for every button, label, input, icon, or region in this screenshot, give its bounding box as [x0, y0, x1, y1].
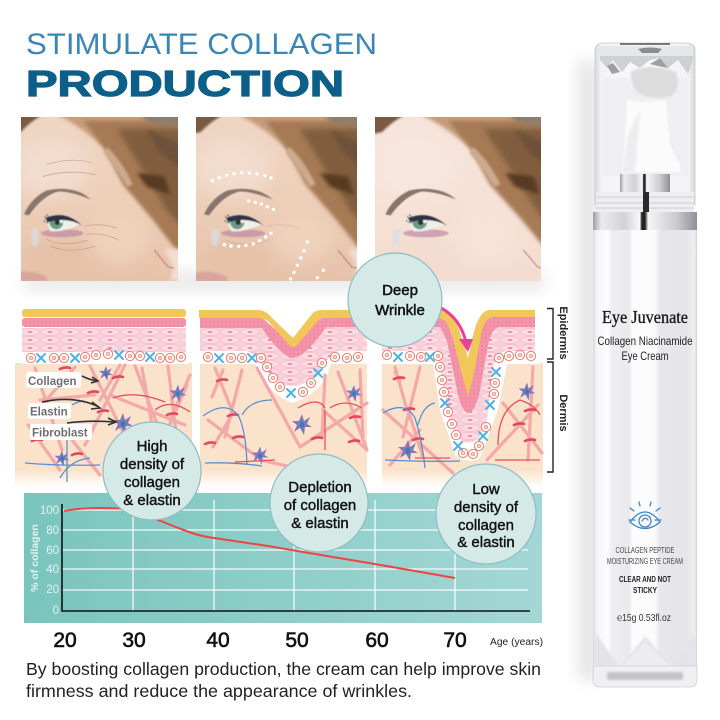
arrow: to fibroblast	[67, 418, 116, 425]
title line: production: PRODUCTION	[26, 63, 344, 104]
callout: high density: density of	[120, 456, 185, 473]
bottle body	[593, 230, 697, 670]
arrow: to elastin	[42, 399, 100, 409]
x axis labels: 20	[53, 629, 77, 652]
icon: eye logo	[629, 502, 661, 528]
arrow: to collagen	[82, 376, 98, 383]
bracket: epidermis	[547, 306, 569, 360]
label: elastin: Elastin	[30, 406, 68, 418]
callout: low density: density of	[454, 499, 519, 516]
x axis labels: 60	[365, 629, 389, 652]
bracket: dermis	[547, 362, 569, 472]
x axis labels: 70	[443, 629, 467, 652]
y axis labels: 100	[40, 505, 59, 517]
clear base	[593, 666, 697, 687]
photo strip: before and after faces	[9, 113, 565, 290]
x axis labels: 40	[206, 629, 230, 652]
bracket: dermis: Dermis	[557, 394, 569, 432]
body text: firmness and reduce the appearance of wrinkles.	[26, 681, 412, 701]
label: fibroblast: Fibroblast	[32, 428, 88, 440]
axes	[62, 504, 530, 611]
product claims: CLEAR AND NOT	[619, 575, 671, 584]
title line: stimulate collagen: STIMULATE COLLAGEN	[26, 28, 377, 61]
product claims: STICKY	[633, 586, 658, 595]
y axis labels: 40	[46, 564, 59, 576]
callout: depletion: Depletion	[288, 479, 352, 496]
x axis labels: 50	[285, 629, 309, 652]
body text: By boosting collagen production, the cream can help improve skin	[26, 659, 541, 679]
callout: deep wrinkle: Deep	[382, 282, 418, 299]
chart: collagen by age	[24, 493, 542, 623]
callout: high density: High	[137, 438, 167, 455]
y axis labels: 60	[46, 545, 59, 557]
silver collar	[593, 212, 697, 230]
label: collagen: Collagen	[28, 376, 77, 388]
skin diagram: deep wrinkle	[382, 308, 543, 488]
title	[26, 28, 377, 104]
y axis labels: 80	[46, 525, 59, 537]
callout: high density: collagen	[124, 474, 180, 491]
brand name: Eye Juvenate	[602, 307, 688, 327]
x axis title: Age (years)	[490, 637, 543, 648]
y axis labels: 0	[53, 605, 59, 617]
x axis labels: 30	[122, 629, 146, 652]
label: collagen	[26, 372, 81, 388]
collagen fibres	[208, 368, 367, 470]
x axis labels	[53, 629, 543, 652]
collagen fibres	[383, 367, 542, 473]
arrow: wrinkle pointer	[441, 308, 473, 352]
product: eye cream bottle	[578, 43, 697, 687]
product name: Collagen Niacinamide	[598, 334, 693, 348]
skin diagram: high density	[15, 309, 192, 488]
y axis labels: 20	[46, 584, 59, 596]
callout: low density	[436, 464, 536, 564]
callout: low density: collagen	[458, 517, 514, 534]
callout: depletion	[270, 454, 368, 552]
product name: Eye Cream	[622, 349, 668, 363]
callout: deep wrinkle	[348, 253, 442, 347]
callout: low density: & elastin	[457, 534, 515, 551]
product claims: COLLAGEN PEPTIDE	[616, 546, 674, 555]
label: elastin	[28, 403, 71, 419]
y axis labels	[40, 505, 59, 617]
bracket: epidermis: Epidermis	[557, 306, 569, 360]
collagen decline line	[64, 508, 455, 578]
y axis title: % of collagen	[29, 524, 41, 592]
skin diagram: depletion	[199, 310, 367, 488]
product claims	[607, 546, 683, 624]
callout: low density: Low	[472, 481, 500, 498]
photo: smooth face	[370, 113, 565, 282]
callout: high density: & elastin	[123, 492, 181, 509]
label: fibroblast	[30, 424, 92, 440]
callout: depletion: of collagen	[284, 497, 356, 514]
photo: wrinkled face	[9, 113, 194, 282]
callout: deep wrinkle: Wrinkle	[375, 302, 425, 319]
product claims: ℮15g 0.53fl.oz	[617, 612, 671, 624]
photo: face with treatment dots	[189, 113, 378, 282]
product name	[598, 334, 693, 363]
collagen fibres	[28, 365, 190, 475]
bottle cap	[595, 43, 695, 212]
callout: high density	[103, 422, 201, 520]
product claims: MOISTURIZING EYE CREAM	[607, 557, 683, 566]
body text	[26, 659, 541, 701]
callout: depletion: & elastin	[291, 515, 349, 532]
treatment dots	[211, 171, 325, 281]
